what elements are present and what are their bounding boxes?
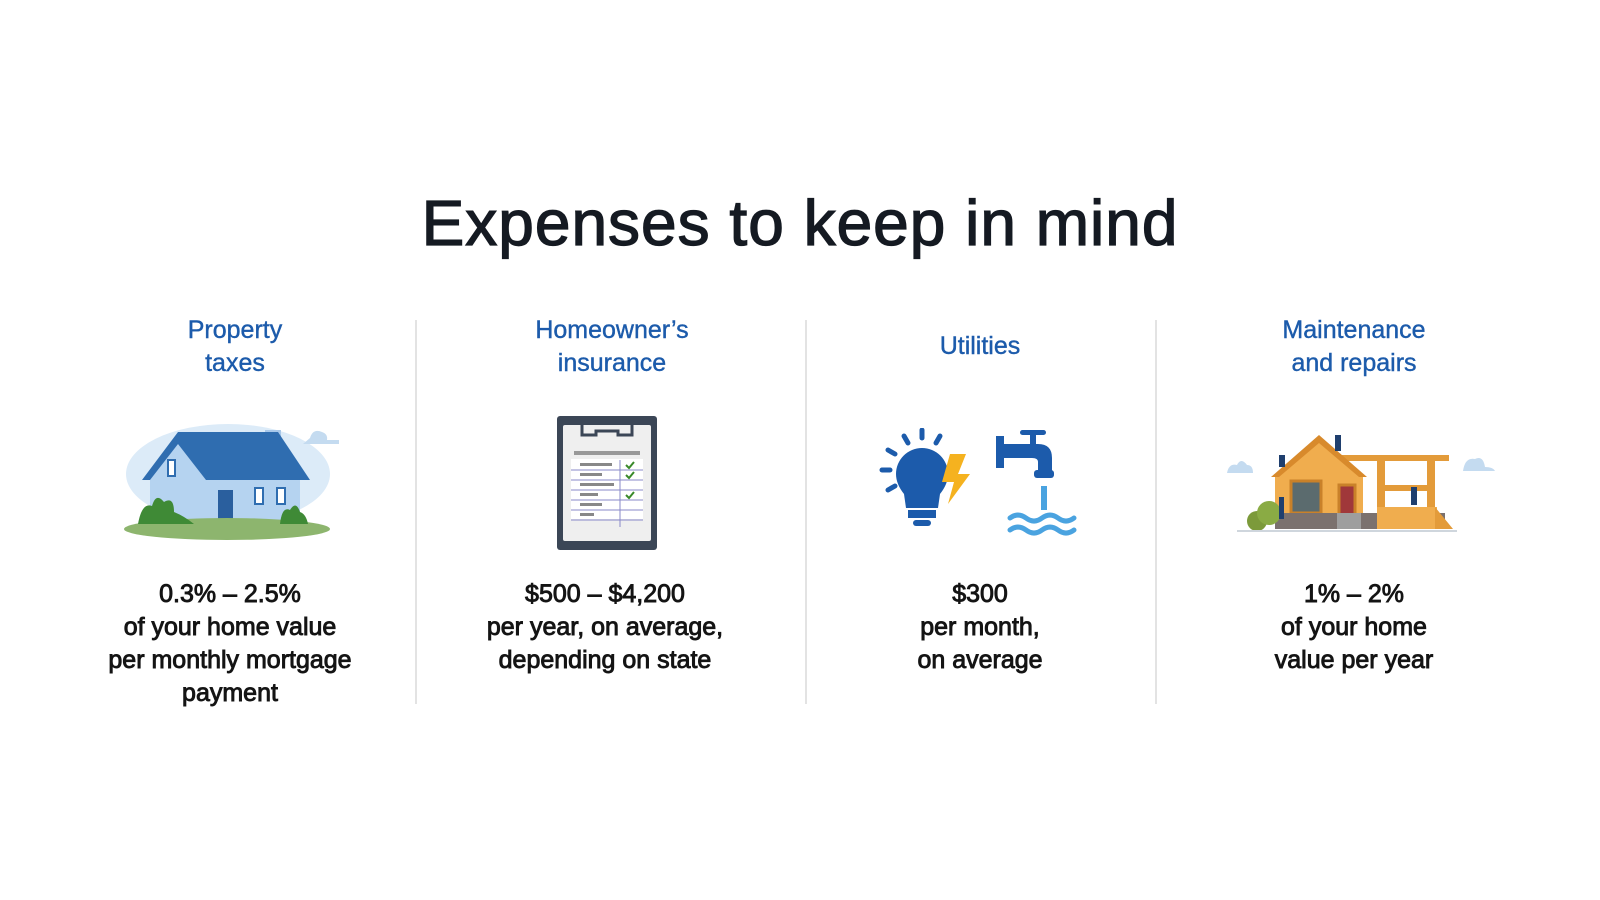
panel: property taxes xyxy=(108,316,352,707)
text: insurance value: per year, on average, xyxy=(487,613,723,641)
heading: homeowner's insurance: insurance xyxy=(558,349,666,377)
text: property taxes value: of your home value xyxy=(124,613,336,641)
panel: homeowner's insurance xyxy=(487,316,723,674)
heading: maintenance: and repairs xyxy=(1291,349,1417,377)
icon: bulb and faucet xyxy=(880,428,1076,536)
heading: maintenance: Maintenance xyxy=(1282,316,1426,344)
heading: homeowner's insurance xyxy=(535,316,689,377)
text: maintenance value: 1% – 2% xyxy=(1304,580,1404,608)
text: maintenance value: value per year xyxy=(1275,646,1433,674)
heading: utilities: Utilities xyxy=(940,332,1020,360)
text: utilities value: per month, xyxy=(920,613,1040,641)
text: maintenance value: of your home xyxy=(1281,613,1427,641)
text: insurance value xyxy=(487,580,723,674)
panel: utilities xyxy=(880,332,1076,674)
text: property taxes value xyxy=(108,580,352,707)
text: utilities value: on average xyxy=(917,646,1043,674)
icon: house xyxy=(124,424,339,540)
panel: maintenance and repairs xyxy=(1227,316,1495,674)
text: property taxes value: per monthly mortgage xyxy=(108,646,352,674)
text: utilities value: $300 xyxy=(952,580,1008,608)
icon: clipboard xyxy=(557,416,657,550)
title: Expenses to keep in mind xyxy=(422,187,1178,259)
text: property taxes value: 0.3% – 2.5% xyxy=(159,580,301,608)
heading: property taxes xyxy=(188,316,282,377)
text: insurance value: $500 – $4,200 xyxy=(525,580,685,608)
heading: maintenance xyxy=(1282,316,1426,377)
icon: house under construction xyxy=(1227,435,1495,532)
text: utilities value xyxy=(917,580,1043,674)
text: insurance value: depending on state xyxy=(499,646,711,674)
text: property taxes value: payment xyxy=(182,679,278,707)
text: maintenance value xyxy=(1274,580,1434,674)
heading: property taxes: taxes xyxy=(205,349,265,377)
heading: homeowner's insurance: Homeowner’s xyxy=(535,316,689,344)
heading: property taxes: Property xyxy=(188,316,282,344)
